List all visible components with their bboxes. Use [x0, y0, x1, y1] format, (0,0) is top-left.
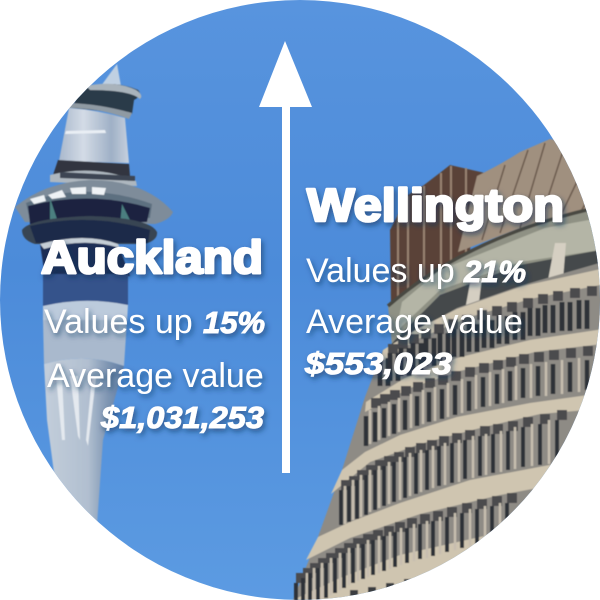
text: values up 15%: Values up [44, 303, 193, 341]
tier 1 windows [366, 351, 593, 446]
tier bands [293, 267, 600, 600]
eave soffit [388, 207, 600, 345]
text: values up 21%: Values up [306, 252, 455, 290]
number: 15%: 15% [203, 305, 265, 340]
photo: Auckland Sky Tower [15, 64, 173, 525]
glass balustrade [392, 250, 598, 344]
heading: Auckland: Auckland [41, 231, 263, 283]
copper dome [458, 139, 600, 252]
arrow [259, 41, 312, 473]
text block: Auckland [41, 231, 265, 435]
number: 21%: 21% [463, 254, 526, 289]
text: average value Auckland: Average value [47, 357, 264, 395]
number: $1,031,253: $1,031,253 [100, 400, 264, 435]
number: $553,023: $553,023 [304, 346, 452, 381]
text: average value Wellington: Average value [306, 303, 523, 341]
photo: Wellington Beehive [293, 139, 600, 600]
tier 4 windows [350, 582, 412, 593]
tier 3 windows [296, 498, 517, 600]
tier 0 windows [380, 291, 597, 386]
building wall [293, 260, 600, 600]
tier 2 windows [341, 415, 567, 525]
heading: Wellington: Wellington [307, 179, 564, 231]
roof fins [390, 165, 485, 306]
text block: Wellington [304, 179, 564, 381]
